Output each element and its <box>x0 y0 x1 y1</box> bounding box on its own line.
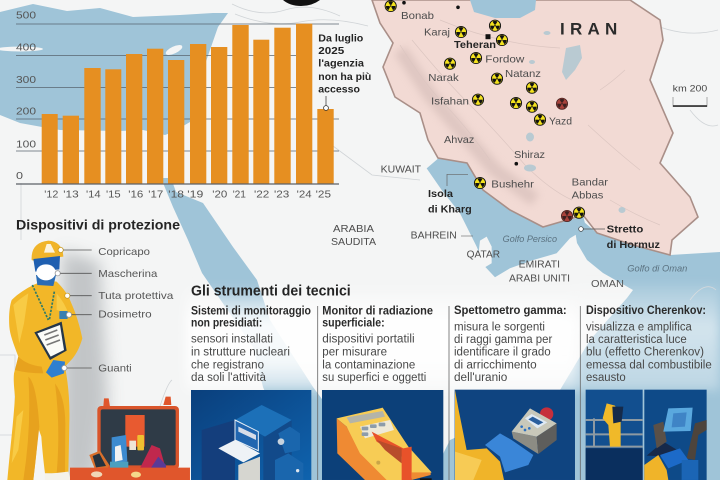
column: unattended monitoring systems: in strutture nucleari <box>191 347 290 359</box>
city labels: Narak <box>428 72 460 84</box>
protective suit <box>7 281 82 480</box>
x axis labels <box>44 189 331 201</box>
y axis labels: 0 <box>16 170 23 182</box>
city labels: Ahvaz <box>444 134 474 146</box>
city labels: Teheran <box>454 39 496 51</box>
sea labels: Golfo di Oman <box>627 264 687 274</box>
country title: Iran: IRAN <box>560 19 617 38</box>
icon: equipment case <box>70 397 190 480</box>
callout: Strait of Hormuz: Stretto <box>607 224 643 235</box>
shoe <box>45 472 71 480</box>
country labels: OMAN <box>591 279 624 290</box>
sea: Red Sea <box>161 178 350 480</box>
label: suit: Tuta protettiva <box>98 290 173 302</box>
callout: access ended <box>318 32 371 110</box>
column: Cherenkov device: esausto <box>586 372 626 384</box>
column: gamma spectrometer: dell'uranio <box>454 372 507 384</box>
x axis labels: '17 <box>148 189 163 201</box>
x axis labels: '16 <box>128 189 143 201</box>
column: surface radiation monitor: superficiale: <box>322 318 385 330</box>
panel: protective equipment <box>7 216 190 480</box>
baseline <box>16 183 339 185</box>
person shadow <box>60 250 108 480</box>
label: helmet: Copricapo <box>98 246 150 258</box>
city labels: Bushehr <box>491 179 535 191</box>
x axis labels: '20 <box>212 189 227 201</box>
column: unattended monitoring systems: da soli l'attività <box>191 372 267 384</box>
clipboard <box>34 322 67 360</box>
city labels: Fordow <box>485 54 525 66</box>
column: gamma spectrometer: misura le sorgenti <box>454 321 545 333</box>
panel: technicians' tools <box>191 284 712 480</box>
heading: protective equipment: Dispositivi di protezione <box>16 216 180 232</box>
white fade behind tools text <box>186 285 720 390</box>
label: suit <box>65 290 173 302</box>
y axis labels: 500 <box>16 9 36 21</box>
x axis labels: '15 <box>106 189 121 201</box>
terrain and lakes <box>400 20 660 225</box>
country labels: QATAR <box>467 250 500 261</box>
x axis labels: '13 <box>63 189 79 201</box>
black disc at top <box>283 0 320 6</box>
x axis labels: '21 <box>233 189 246 201</box>
grid lines <box>16 24 339 151</box>
bar chart: inspections per year <box>16 9 371 201</box>
figure: technician in protective suit <box>7 241 82 480</box>
y axis labels: 200 <box>16 106 36 118</box>
illustration: monitoring cabinet <box>191 390 311 480</box>
column: unattended monitoring systems: che registrano <box>191 359 264 371</box>
label: gloves <box>62 363 132 375</box>
column: unattended monitoring systems <box>191 305 311 480</box>
label: mask <box>55 268 157 280</box>
callout: access ended: accesso <box>318 84 360 96</box>
column: Cherenkov device: Dispositivo Cherenkov: <box>586 305 706 317</box>
column: Cherenkov device: visualizza e amplifica <box>586 321 692 333</box>
x axis labels: '14 <box>86 189 101 201</box>
x axis labels: '22 <box>254 189 269 201</box>
bars <box>42 24 334 184</box>
label: dosimeter <box>66 309 152 321</box>
column: gamma spectrometer: di arricchimento <box>454 359 537 371</box>
city markers <box>402 1 518 166</box>
scale bar: km 200 <box>673 84 707 95</box>
column: Cherenkov device: blu (effetto Cherenkov) <box>586 347 704 359</box>
y axis labels: 400 <box>16 42 36 54</box>
column separators <box>318 306 580 480</box>
x axis labels: '18 <box>168 189 184 201</box>
city labels <box>401 10 609 202</box>
country labels: ARABIA <box>333 224 374 235</box>
callout: Strait of Hormuz: di Hormuz <box>607 240 660 251</box>
peninsula: Qatar <box>478 237 492 267</box>
city labels: Natanz <box>505 68 541 80</box>
column: Cherenkov device: la caratteristica luce <box>586 334 687 346</box>
illustration: gamma spectrometer <box>455 390 575 480</box>
country labels <box>331 164 624 290</box>
city labels: Shiraz <box>514 149 545 161</box>
callout: access ended: non ha più <box>318 71 371 83</box>
hood and goggles <box>36 275 56 286</box>
country labels: EMIRATI <box>519 260 560 271</box>
column: surface radiation monitor: su superfici e oggetti <box>322 372 426 384</box>
column: unattended monitoring systems: Sistemi di monitoraggio <box>191 305 311 317</box>
column: Cherenkov device <box>586 305 712 480</box>
y axis labels <box>16 9 36 182</box>
city labels: Karaj <box>424 27 450 39</box>
column: gamma spectrometer: identificare il grado <box>454 347 551 359</box>
column: surface radiation monitor: dispositivi portatili <box>322 334 415 346</box>
city labels: Abbas <box>572 190 603 202</box>
callout: Kharg island: di Kharg <box>428 205 472 216</box>
sea: Mediterranean <box>0 4 228 135</box>
country labels: ARABI UNITI <box>509 274 570 285</box>
x axis labels: '19 <box>187 189 203 201</box>
map labels and markers <box>331 0 707 290</box>
callout: access ended: 2025 <box>318 45 344 57</box>
y axis labels: 300 <box>16 74 36 86</box>
y axis labels: 100 <box>16 138 36 150</box>
city labels: Isfahan <box>431 96 469 108</box>
callout: access ended: Da luglio <box>318 32 363 44</box>
x axis labels: '24 <box>297 189 312 201</box>
country labels: KUWAIT <box>381 164 421 175</box>
glove <box>46 360 65 378</box>
label: helmet <box>58 246 150 258</box>
Bahrain leader <box>461 235 473 237</box>
column: Cherenkov device: emessa dal combustibile <box>586 359 712 371</box>
x axis labels: '25 <box>316 189 331 201</box>
column: gamma spectrometer: di raggi gamma per <box>454 334 552 346</box>
country labels: SAUDITA <box>331 237 376 248</box>
label: dosimeter: Dosimetro <box>98 309 152 321</box>
sea labels <box>503 234 687 274</box>
city labels: Yazd <box>549 115 572 127</box>
lanyard <box>32 285 54 320</box>
heading: tools: Gli strumenti dei tecnici <box>191 284 351 300</box>
column: surface radiation monitor: Monitor di radiazione <box>322 305 433 317</box>
sea: Persian Gulf <box>427 158 587 277</box>
nuclear sites <box>385 0 585 222</box>
label: mask: Mascherina <box>98 268 157 280</box>
column: gamma spectrometer: Spettometro gamma: <box>454 305 567 317</box>
x axis labels: '12 <box>44 189 58 201</box>
Iran territory <box>372 0 698 255</box>
relief: Zagros mountains <box>400 50 535 200</box>
island: Cyprus <box>164 43 184 57</box>
dosimeter <box>59 311 68 319</box>
column: unattended monitoring systems: sensori installati <box>191 334 273 346</box>
illustration: Cherenkov device <box>586 390 707 480</box>
illustration: surface monitor <box>322 390 443 480</box>
column: unattended monitoring systems: non presidiati: <box>191 318 262 330</box>
label: gloves: Guanti <box>98 363 132 375</box>
column: surface radiation monitor: per misurare <box>322 347 387 359</box>
column: gamma spectrometer <box>454 305 575 480</box>
sea: Caspian <box>470 0 536 18</box>
callout: Strait of Hormuz <box>579 224 660 251</box>
sea labels: Golfo Persico <box>503 234 557 244</box>
callout: Kharg island <box>428 174 472 216</box>
callout: access ended: l'agenzia <box>318 57 364 69</box>
column: surface radiation monitor: la contaminazione <box>322 359 415 371</box>
city labels: Bonab <box>401 10 434 22</box>
scale bar <box>673 84 707 106</box>
country labels: BAHREIN <box>411 231 457 242</box>
island: Crete <box>0 46 43 52</box>
city labels: Bandar <box>572 177 609 189</box>
callout: Kharg island: Isola <box>428 189 453 200</box>
sea: Gulf of Oman and Arabian Sea <box>430 217 720 480</box>
column: surface radiation monitor <box>322 305 443 480</box>
x axis labels: '23 <box>274 189 289 201</box>
